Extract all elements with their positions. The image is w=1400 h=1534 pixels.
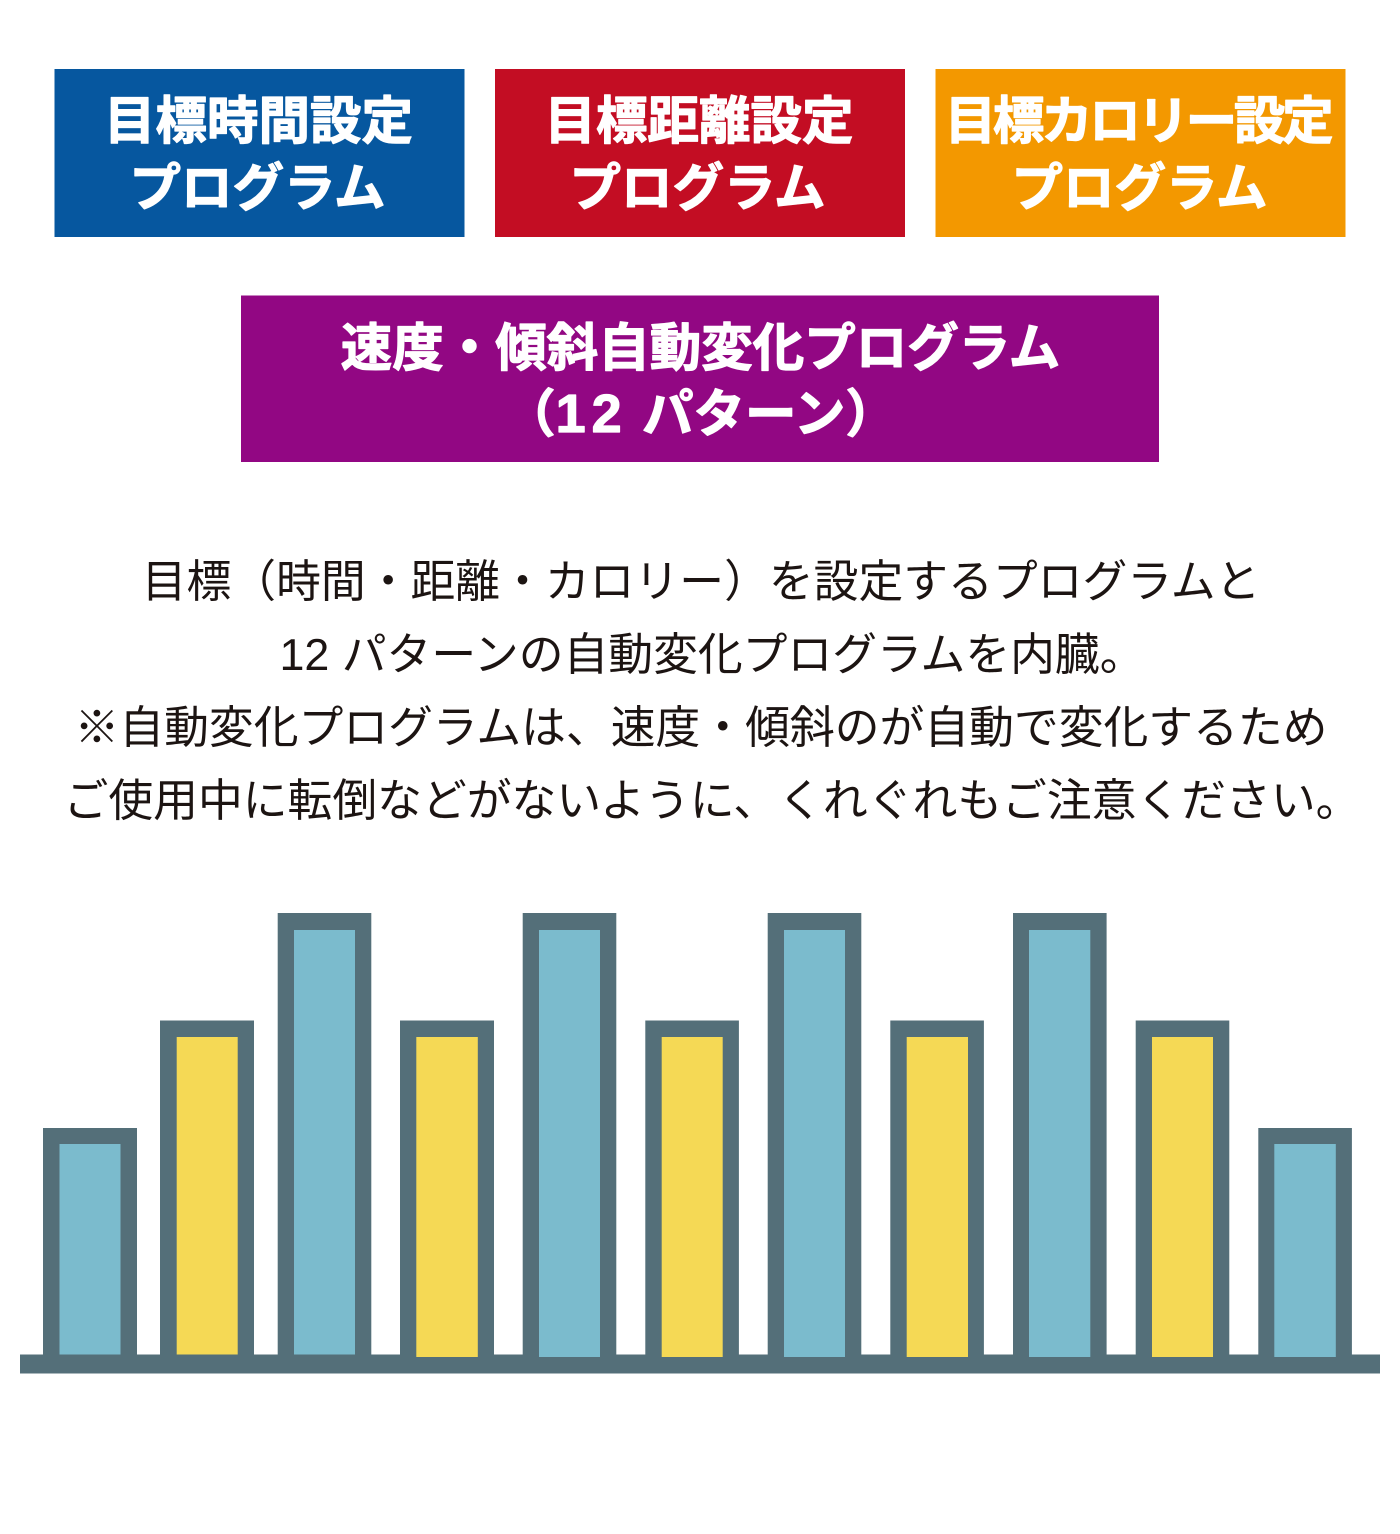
- button: target distance program: プログラム: [570, 159, 825, 217]
- button: target distance program: [495, 69, 905, 237]
- description text: ご使用中に転倒などがないように、くれぐれもご注意ください。: [64, 776, 1360, 826]
- button: target calorie program: [936, 69, 1346, 237]
- button: automatic speed and incline program: （12 パターン）: [504, 384, 897, 444]
- button: target calorie program: 目標カロリー設定: [945, 92, 1332, 150]
- bar chart illustration: [20, 913, 1380, 1374]
- button: automatic speed and incline program: 速度・傾斜自動変化プログラム: [341, 319, 1060, 377]
- button: target time program: [54, 69, 464, 237]
- description text: 12 パターンの自動変化プログラムを内臓。: [279, 630, 1145, 680]
- description text: ※自動変化プログラムは、速度・傾斜のが自動で変化するため: [74, 703, 1327, 753]
- button: automatic speed and incline program: [241, 296, 1159, 462]
- button: target calorie program: プログラム: [1012, 159, 1267, 217]
- description text: [64, 557, 1360, 826]
- button: target time program: 目標時間設定: [104, 92, 413, 150]
- button: target time program: プログラム: [130, 159, 385, 217]
- description text: 目標（時間・距離・カロリー）を設定するプログラムと: [142, 557, 1260, 607]
- button: target distance program: 目標距離設定: [544, 92, 854, 150]
